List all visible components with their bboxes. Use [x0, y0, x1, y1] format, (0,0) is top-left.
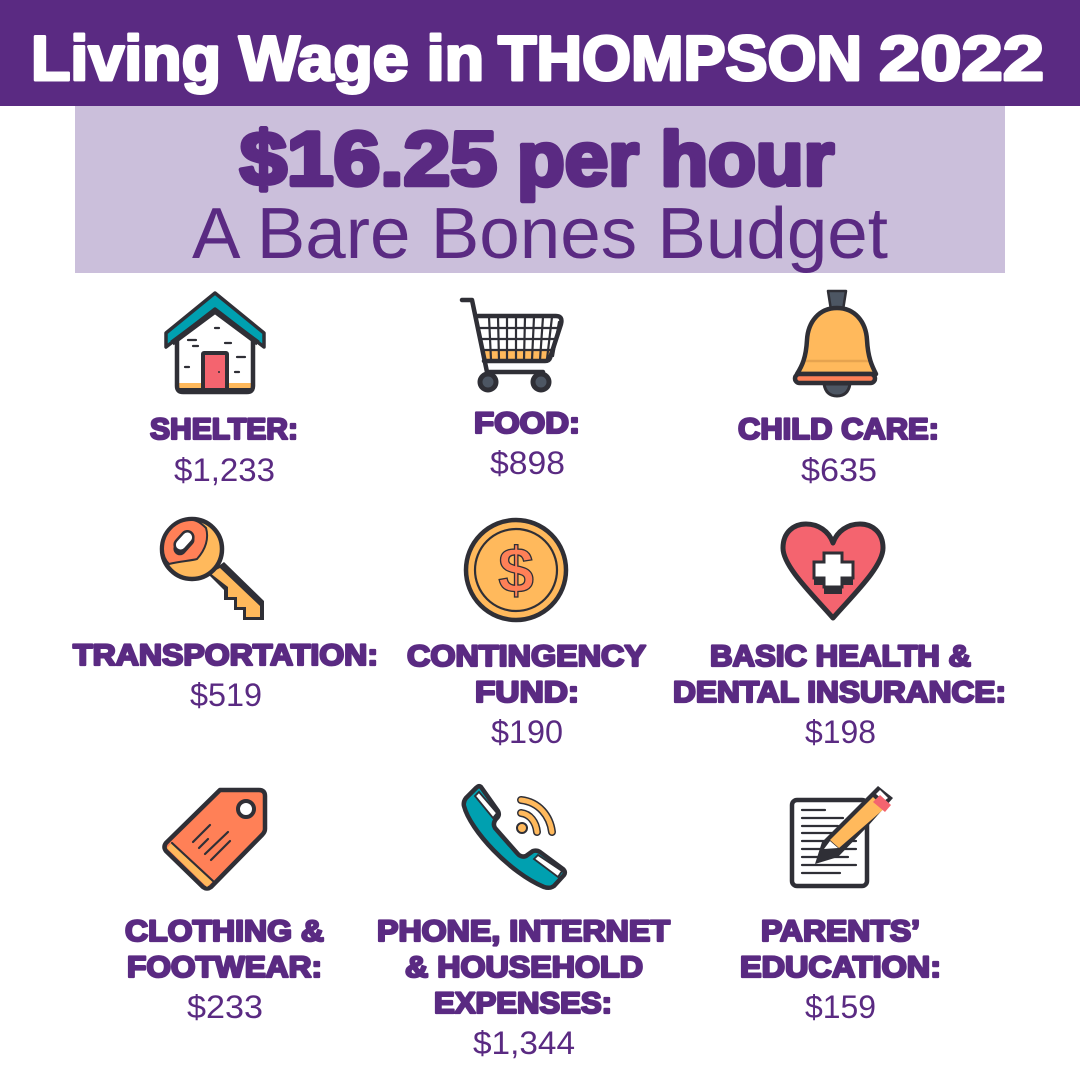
- amount: $198: [805, 714, 876, 750]
- label: CLOTHING &: [125, 915, 324, 948]
- amount: $519: [190, 677, 262, 713]
- title: THOMPSON: [498, 24, 862, 94]
- icon: house: [166, 293, 264, 392]
- item: food: [462, 300, 580, 481]
- title: Living Wage in: [31, 24, 484, 94]
- icon: bell: [795, 291, 876, 396]
- icon: shopping cart: [462, 300, 561, 390]
- item: child care: [738, 291, 939, 488]
- item: parents' education: [740, 786, 941, 1025]
- icon: coin: [466, 520, 566, 620]
- header banner: [0, 0, 1080, 106]
- icon: price tag: [164, 790, 265, 888]
- amount: $898: [490, 445, 565, 481]
- hourly wage heading: $16.25: [240, 117, 497, 202]
- label: [125, 915, 324, 984]
- label: [740, 915, 941, 984]
- icon: key: [162, 519, 264, 620]
- label: [407, 640, 646, 709]
- amount: $233: [187, 989, 263, 1025]
- label: PHONE, INTERNET: [377, 915, 670, 948]
- amount: $1,344: [473, 1025, 575, 1061]
- item: health and dental: [673, 524, 1006, 750]
- label: FUND:: [475, 676, 579, 709]
- icon: paper and pencil: [792, 786, 893, 886]
- label: CONTINGENCY: [407, 640, 646, 673]
- label: DENTAL INSURANCE:: [673, 676, 1006, 709]
- hourly wage heading: per hour: [517, 117, 834, 202]
- item: phone, internet, household: [377, 786, 670, 1061]
- item: shelter: [150, 293, 298, 488]
- amount: $159: [805, 989, 876, 1025]
- title: 2022: [879, 24, 1044, 94]
- amount: $1,233: [174, 452, 275, 488]
- label: FOOTWEAR:: [127, 951, 322, 984]
- icon: heart with cross: [783, 524, 883, 618]
- label: TRANSPORTATION:: [73, 639, 378, 672]
- amount: $190: [491, 714, 563, 750]
- hourly wage heading: [240, 117, 834, 202]
- label: EDUCATION:: [740, 951, 941, 984]
- icon: coin: $: [498, 534, 534, 606]
- label: CHILD CARE:: [738, 413, 939, 446]
- budget subheading: A Bare Bones Budget: [192, 194, 888, 274]
- title: [31, 24, 1044, 94]
- amount: $635: [801, 452, 877, 488]
- label: PARENTS’: [761, 915, 920, 948]
- icon: phone with signal: [464, 786, 565, 888]
- item: clothing and footwear: [125, 790, 324, 1025]
- subtitle panel: [75, 106, 1005, 274]
- label: SHELTER:: [150, 413, 298, 446]
- item: contingency fund: [407, 520, 646, 750]
- label: BASIC HEALTH &: [710, 640, 971, 673]
- item: transportation: [73, 519, 378, 713]
- label: [377, 915, 670, 1020]
- label: EXPENSES:: [434, 987, 612, 1020]
- label: [673, 640, 1006, 709]
- label: FOOD:: [474, 407, 580, 440]
- label: & HOUSEHOLD: [405, 951, 643, 984]
